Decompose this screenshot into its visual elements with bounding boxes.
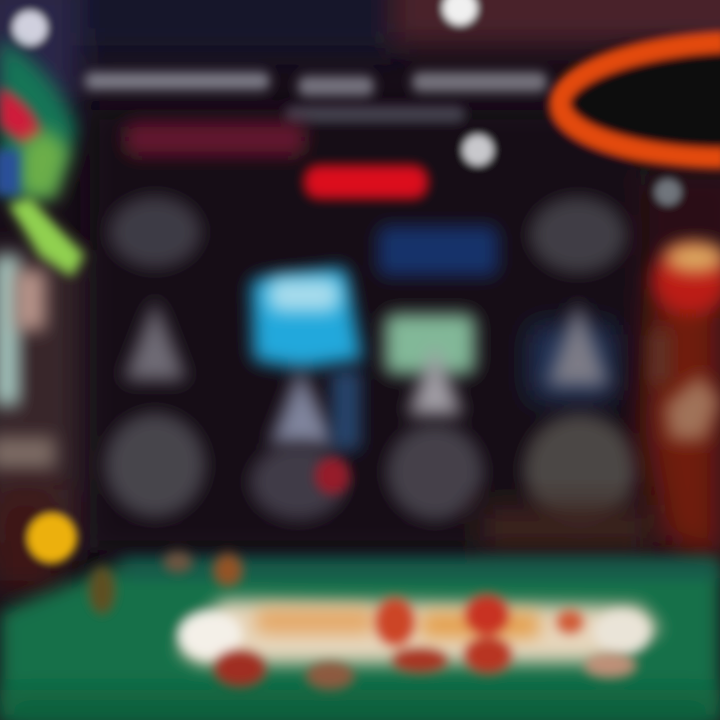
panel: slot machine 3 xyxy=(385,314,483,520)
panel: slot machine 1 xyxy=(105,196,205,517)
icon: yellow coin xyxy=(28,514,76,562)
badge: red label xyxy=(305,166,427,198)
label: blue panel xyxy=(378,226,498,276)
panel: slot machine 2 xyxy=(250,268,362,520)
lights: white bulbs xyxy=(13,0,681,205)
table: green felt xyxy=(0,505,720,720)
icon: orange neon ring xyxy=(557,42,720,158)
background: ceiling and wall xyxy=(0,0,720,550)
subtitle: maroon band xyxy=(125,122,305,156)
panel: left decorations xyxy=(0,40,84,590)
panel: slot machine 4 xyxy=(524,197,636,526)
table item: white betting mat xyxy=(178,600,660,664)
chips: red casino chips xyxy=(89,552,636,689)
figure: person in red on the right xyxy=(645,243,720,560)
heading: blurred title text xyxy=(85,72,547,122)
